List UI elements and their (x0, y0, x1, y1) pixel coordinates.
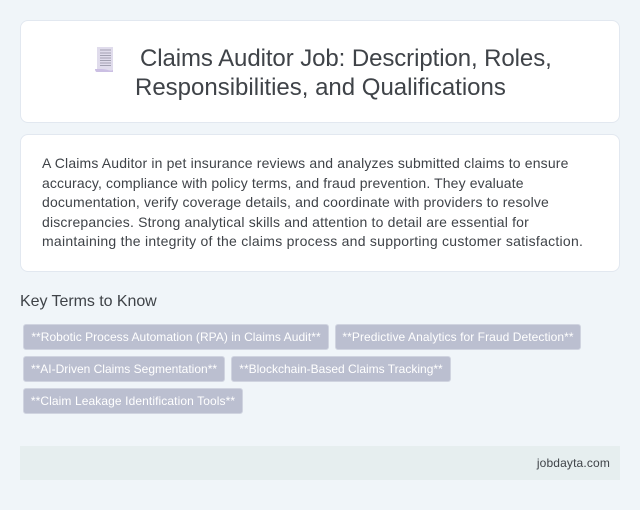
tag: blockchain (231, 356, 451, 382)
tag: AI segmentation (23, 356, 225, 382)
tag: RPA: **Robotic Process Automation (RPA) in Claims Audit** (31, 330, 321, 344)
tag: predictive analytics: **Predictive Analytics for Fraud Detection** (342, 330, 574, 344)
title: Responsibilities, and Qualifications (135, 74, 506, 101)
panel: description (20, 134, 620, 272)
footer (20, 446, 620, 480)
footer source text: jobdayta.com (537, 456, 610, 470)
icon: document receipt (95, 47, 113, 72)
title: Claims Auditor Job: Description, Roles, (140, 45, 552, 72)
heading: key terms: Key Terms to Know (20, 293, 157, 310)
description text: A Claims Auditor in pet insurance reviews and analyzes submitted claims to ensure (42, 155, 569, 171)
tag: AI segmentation: **AI-Driven Claims Segmentation** (31, 362, 217, 376)
tag: predictive analytics (335, 324, 581, 350)
description text: accuracy, compliance with policy terms, and fraud prevention. They evaluate (42, 174, 524, 190)
description text: discrepancies. Strong analytical skills and attention to detail are essential for (42, 214, 529, 230)
description text: maintaining the integrity of the claims process and supporting customer satisfaction. (42, 233, 583, 249)
tag: blockchain: **Blockchain-Based Claims Tracking** (239, 362, 443, 376)
title (135, 45, 552, 101)
panel: title card (20, 20, 620, 123)
description text: documentation, verify coverage details, and coordinate with providers to resolve (42, 194, 549, 210)
tag: claim leakage: **Claim Leakage Identification Tools** (31, 394, 235, 408)
description text (42, 155, 583, 249)
tag: claim leakage (23, 388, 243, 414)
tag: RPA (23, 324, 329, 350)
